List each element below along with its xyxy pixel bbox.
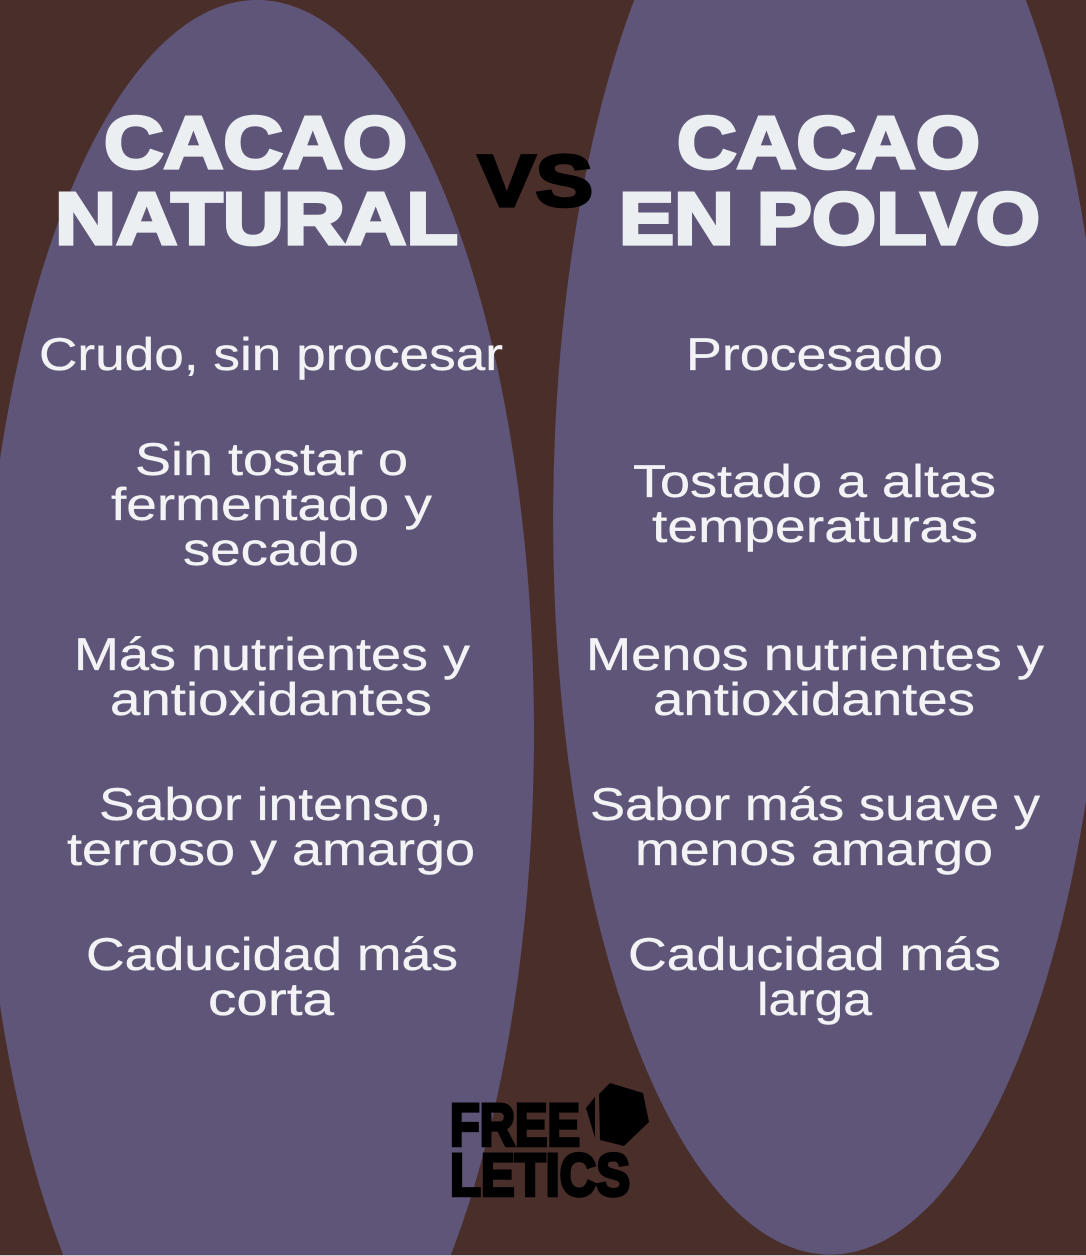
- right column: cocoa powder attributes: [586, 328, 1044, 1025]
- text: tostado: [633, 455, 996, 552]
- heading: vs: VS: [478, 141, 593, 222]
- text: sabor suave: [590, 778, 1040, 875]
- icon: pentagon: [586, 1083, 649, 1146]
- text: sin tostar: secado: [183, 523, 359, 575]
- logo wordmark: FREE: [450, 1092, 580, 1158]
- text: caducidad corta: Caducidad más: [86, 928, 458, 980]
- text: caducidad larga: Caducidad más: [628, 928, 1001, 980]
- heading: cacao en polvo: CACAO: [677, 101, 980, 184]
- text: crudo: Crudo, sin procesar: [39, 328, 503, 380]
- text: menos nutrientes: [586, 628, 1044, 725]
- text: sabor intenso: Sabor intenso,: [99, 778, 444, 830]
- panel: left ellipse: [0, 0, 534, 1256]
- text: sabor suave: Sabor más suave y: [590, 778, 1040, 830]
- text: procesado: Procesado: [686, 328, 943, 380]
- panel: right ellipse: [553, 0, 1086, 1255]
- text: caducidad corta: corta: [208, 973, 335, 1025]
- heading: cacao en polvo: EN POLVO: [619, 177, 1040, 260]
- heading: cacao natural: CACAO: [104, 101, 407, 184]
- text: caducidad corta: [86, 928, 458, 1025]
- text: sabor intenso: [67, 778, 475, 875]
- text: tostado: temperaturas: [652, 500, 978, 552]
- text: tostado: Tostado a altas: [633, 455, 996, 507]
- text: más nutrientes: antioxidantes: [110, 673, 432, 725]
- logo wordmark: LETICS: [450, 1142, 630, 1208]
- text: sin tostar: fermentado y: [111, 478, 432, 530]
- text: menos nutrientes: Menos nutrientes y: [586, 628, 1044, 680]
- text: caducidad larga: larga: [757, 973, 872, 1025]
- text: menos nutrientes: antioxidantes: [653, 673, 975, 725]
- text: sabor suave: menos amargo: [635, 823, 993, 875]
- logo: freeletics: [450, 1083, 649, 1208]
- heading: cacao natural: [55, 101, 458, 260]
- heading: cacao natural: NATURAL: [55, 177, 458, 260]
- text: más nutrientes: [74, 628, 470, 725]
- logo wordmark: [450, 1092, 630, 1208]
- text: sabor intenso: terroso y amargo: [67, 823, 475, 875]
- text: sin tostar: [111, 433, 432, 575]
- left column: natural cocoa attributes: [39, 328, 503, 1025]
- text: caducidad larga: [628, 928, 1001, 1025]
- heading: cacao en polvo: [619, 101, 1040, 260]
- text: más nutrientes: Más nutrientes y: [74, 628, 470, 680]
- text: sin tostar: Sin tostar o: [135, 433, 408, 485]
